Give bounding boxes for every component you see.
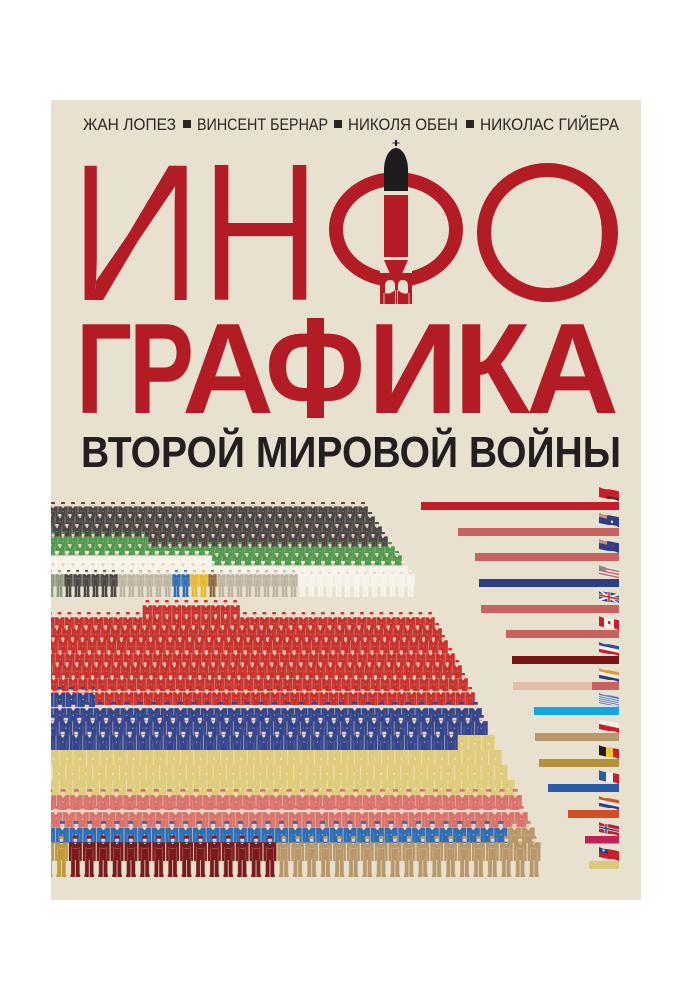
bar: Yugoslavia — [512, 642, 619, 664]
bar: Belgium — [539, 745, 619, 767]
authors line: ВИНСЕНТ БЕРНАР — [197, 116, 328, 134]
authors line: ЖАН ЛОПЕЗ — [83, 116, 176, 134]
title: ГРАФИКА: Р — [129, 297, 194, 441]
title: ИНФО: И — [67, 121, 204, 345]
bar: France — [548, 770, 619, 792]
bar: Canada — [506, 616, 619, 638]
chart: horizontal bars with flags — [421, 487, 619, 869]
upper soldier block — [51, 502, 415, 597]
title: ГРАФИКА: А — [182, 297, 274, 441]
title: ГРАФИКА: Г — [76, 297, 132, 441]
book cover background — [51, 100, 641, 900]
bar: Greece — [534, 693, 619, 715]
bar: USA — [479, 565, 619, 587]
authors line — [83, 115, 619, 134]
title: ИНФО: Н — [200, 121, 321, 344]
authors line: НИКОЛАС ГИЙЕРА — [480, 115, 619, 134]
bar: Netherlands — [568, 796, 619, 818]
bar: Poland — [535, 719, 619, 741]
bar: China — [589, 847, 619, 869]
bar: United Kingdom — [481, 590, 619, 613]
bar: USSR — [421, 487, 619, 510]
bar: South Africa — [513, 668, 619, 690]
subtitle: ВТОРОЙ МИРОВОЙ ВОЙНЫ — [81, 426, 621, 477]
bar: Australia — [458, 513, 619, 536]
title: ГРАФИКА: Ф — [265, 297, 365, 441]
lower soldier block — [6, 600, 541, 877]
title: ИНФО: О — [466, 128, 627, 340]
chart: soldier pyramid — [0, 502, 541, 877]
bar: New Zealand — [475, 539, 619, 561]
title: ГРАФИКА: А — [526, 297, 619, 441]
title: ГРАФИКА: К — [454, 297, 530, 441]
title: ГРАФИКА — [76, 297, 619, 441]
title: ГРАФИКА: И — [368, 297, 458, 441]
title: ИНФО: Ф — [307, 92, 485, 382]
icon: aerial bomb — [380, 140, 412, 304]
authors line: НИКОЛЯ ОБЕН — [348, 116, 458, 134]
title: ИНФО — [84, 163, 618, 302]
bar: Norway — [585, 822, 619, 844]
